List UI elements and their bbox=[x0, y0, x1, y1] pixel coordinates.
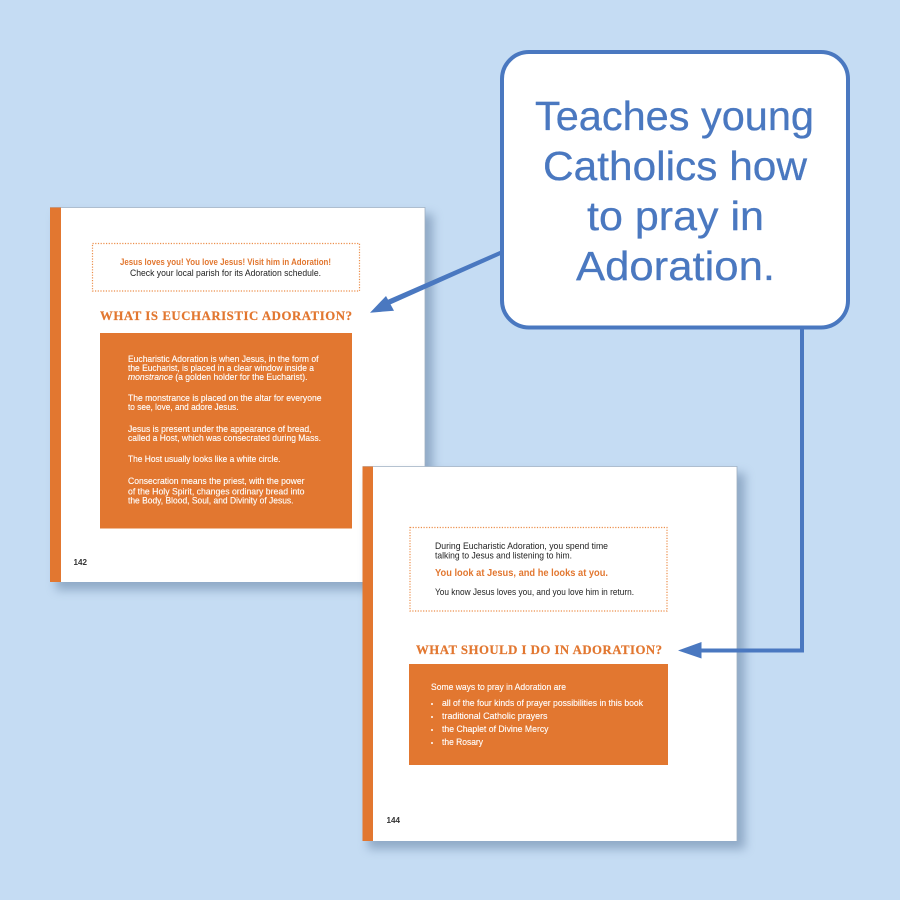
orange text panel: ways to pray: Some ways to pray in Adoration are bbox=[431, 682, 566, 692]
orange text panel: explanation: called a Host, which was consecrated during Mass. bbox=[128, 433, 321, 443]
callout box: you look at Jesus: You know Jesus loves you, and you love him in return. bbox=[435, 587, 634, 597]
orange text panel: explanation: The Host usually looks like a white circle. bbox=[128, 454, 280, 464]
callout box: you look at Jesus bbox=[410, 528, 667, 611]
orange text panel: ways to pray: all of the four kinds of prayer possibilities in this book bbox=[442, 698, 643, 708]
heading: what should I do in Adoration: WHAT SHOULD I DO IN ADORATION? bbox=[416, 643, 662, 657]
arrow: callout to page 144 heading bbox=[678, 327, 802, 658]
page number 144: 144 bbox=[386, 815, 400, 825]
orange text panel: explanation: Jesus is present under the appearance of bread, bbox=[128, 424, 312, 434]
orange text panel: explanation: the Eucharist, is placed in a clear window inside a bbox=[128, 363, 315, 373]
callout: teaches young Catholics: to pray in bbox=[587, 193, 764, 239]
orange text panel: explanation: the Body, Blood, Soul, and Divinity of Jesus. bbox=[128, 496, 294, 506]
orange text panel: ways to pray bbox=[409, 664, 668, 765]
callout: teaches young Catholics: Catholics how bbox=[543, 143, 807, 189]
orange page strip bbox=[362, 466, 373, 841]
orange text panel: explanation: The monstrance is placed on the altar for everyone bbox=[128, 393, 322, 403]
callout box: you look at Jesus: During Eucharistic Adoration, you spend time bbox=[435, 541, 608, 551]
orange text panel: explanation: Consecration means the priest, with the power bbox=[128, 476, 304, 486]
callout box: you look at Jesus: talking to Jesus and listening to him. bbox=[435, 550, 572, 560]
callout: teaches young Catholics: Teaches young bbox=[535, 93, 814, 139]
orange text panel: ways to pray: the Chaplet of Divine Mercy bbox=[442, 724, 549, 734]
orange text panel: explanation: monstrance (a golden holder for the Eucharist). bbox=[128, 372, 308, 382]
heading: what is Eucharistic Adoration: WHAT IS EUCHARISTIC ADORATION? bbox=[100, 309, 352, 323]
orange text panel: ways to pray: the Rosary bbox=[442, 737, 483, 747]
callout: teaches young Catholics bbox=[502, 52, 848, 328]
orange text panel: explanation bbox=[100, 333, 352, 528]
callout box: you look at Jesus: You look at Jesus, and he looks at you. bbox=[435, 567, 608, 579]
orange text panel: explanation: Eucharistic Adoration is when Jesus, in the form of bbox=[128, 354, 319, 364]
panel: book page 144 bbox=[362, 466, 745, 849]
orange text panel: explanation: to see, love, and adore Jesus. bbox=[128, 402, 238, 412]
callout box: visit Jesus in Adoration: Jesus loves you! You love Jesus! Visit him in Adoration! bbox=[120, 257, 331, 267]
orange text panel: ways to pray: traditional Catholic prayers bbox=[442, 711, 548, 721]
callout box: visit Jesus in Adoration: Check your local parish for its Adoration schedule. bbox=[130, 268, 321, 278]
callout box: visit Jesus in Adoration bbox=[92, 244, 360, 291]
callout: teaches young Catholics: Adoration. bbox=[576, 243, 775, 289]
orange text panel: explanation: of the Holy Spirit, changes ordinary bread into bbox=[128, 486, 304, 496]
orange page strip bbox=[50, 208, 61, 582]
arrow: callout to page 142 heading bbox=[370, 250, 503, 313]
page number 142: 142 bbox=[74, 557, 87, 567]
panel: book page 142 bbox=[50, 208, 433, 590]
